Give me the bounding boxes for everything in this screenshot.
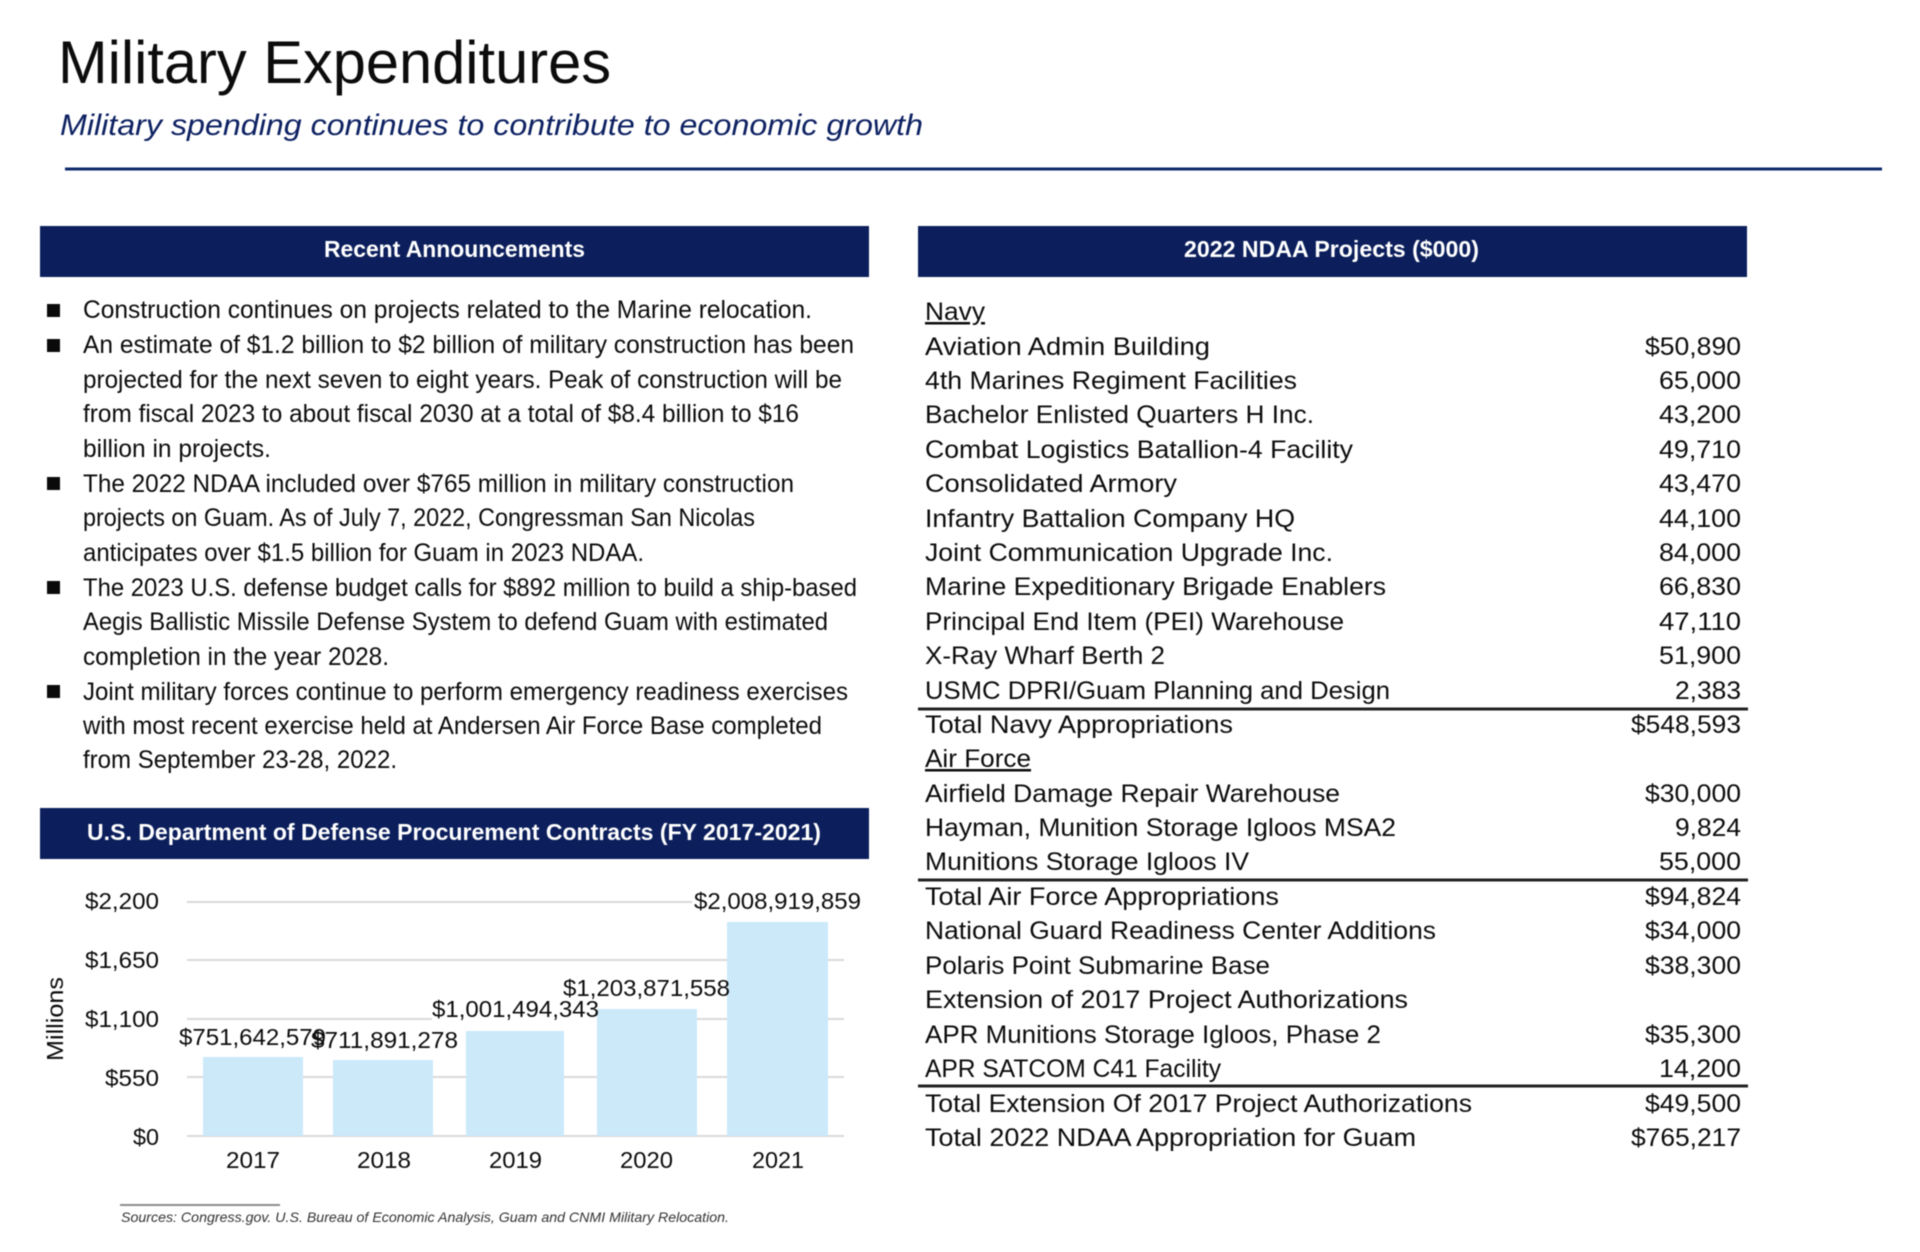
- subtitle: Military spending continues to contribute to economic growth: [60, 109, 923, 142]
- table of projects: $34,000: [1645, 917, 1741, 945]
- table of projects: Principal End Item (PEI) Warehouse: [925, 608, 1344, 636]
- y axis labels: $550: [105, 1065, 159, 1091]
- table of projects: Joint Communication Upgrade Inc.: [925, 539, 1333, 567]
- bullet list: The 2022 NDAA included over $765 million in military construction: [83, 470, 794, 498]
- table of projects: 9,824: [1675, 814, 1741, 842]
- table of projects: $50,890: [1645, 333, 1741, 361]
- table of projects: 4th Marines Regiment Facilities: [925, 367, 1297, 395]
- bar chart: [42, 888, 862, 1173]
- table of projects: Total Navy Appropriations: [925, 711, 1233, 739]
- table of projects: Bachelor Enlisted Quarters H Inc.: [925, 401, 1314, 429]
- bullet list: projects on Guam. As of July 7, 2022, Congressman San Nicolas: [83, 504, 755, 532]
- table of projects: 55,000: [1659, 848, 1741, 876]
- table of projects: Munitions Storage Igloos IV: [925, 848, 1249, 876]
- data labels: $1,203,871,558: [563, 975, 730, 1001]
- table of projects: 47,110: [1659, 608, 1741, 636]
- heading: recent announcements: Recent Announcements: [324, 236, 585, 262]
- table of projects: 84,000: [1659, 539, 1741, 567]
- table of projects: $35,300: [1645, 1021, 1741, 1049]
- y axis labels: $1,650: [85, 947, 159, 973]
- table of projects: Airfield Damage Repair Warehouse: [925, 780, 1340, 808]
- x axis labels: 2021: [752, 1147, 804, 1173]
- table of projects: $38,300: [1645, 952, 1741, 980]
- heading: recent announcements: [40, 226, 869, 277]
- table of projects: 51,900: [1659, 642, 1741, 670]
- bullet list: with most recent exercise held at Andersen Air Force Base completed: [82, 712, 822, 740]
- panel: recent announcements: [40, 226, 869, 774]
- data labels: $1,001,494,343: [432, 996, 599, 1022]
- table of projects: 49,710: [1659, 436, 1741, 464]
- table of projects: $49,500: [1645, 1090, 1741, 1118]
- bars: [203, 922, 828, 1136]
- table of projects: 14,200: [1659, 1055, 1741, 1083]
- bullet list: completion in the year 2028.: [83, 643, 389, 671]
- table of projects: Total Air Force Appropriations: [925, 883, 1279, 911]
- bullet list: Construction continues on projects related to the Marine relocation.: [83, 296, 812, 324]
- table of projects: Aviation Admin Building: [925, 333, 1210, 361]
- bullet list: The 2023 U.S. defense budget calls for $892 million to build a ship-based: [83, 574, 857, 602]
- bullet list: [47, 296, 857, 774]
- y axis labels: [85, 888, 159, 1150]
- table of projects: 43,200: [1659, 401, 1741, 429]
- table of projects: 44,100: [1659, 505, 1741, 533]
- data labels: $711,891,278: [311, 1027, 458, 1053]
- table of projects: Extension of 2017 Project Authorizations: [925, 986, 1408, 1014]
- table of projects: APR SATCOM C41 Facility: [925, 1055, 1221, 1083]
- table of projects: 65,000: [1659, 367, 1741, 395]
- table of projects: Polaris Point Submarine Base: [925, 952, 1270, 980]
- x axis labels: 2017: [226, 1147, 280, 1173]
- bullet list: anticipates over $1.5 billion for Guam in 2023 NDAA.: [83, 539, 644, 567]
- data labels: [179, 888, 861, 1053]
- table of projects: $94,824: [1645, 883, 1741, 911]
- table of projects: Total 2022 NDAA Appropriation for Guam: [925, 1124, 1416, 1152]
- table of projects: Combat Logistics Batallion-4 Facility: [925, 436, 1354, 464]
- heading: 2022 NDAA projects: [918, 226, 1747, 277]
- table of projects: 66,830: [1659, 573, 1741, 601]
- bullet list: An estimate of $1.2 billion to $2 billion of military construction has been: [83, 331, 854, 359]
- bullet list: billion in projects.: [83, 435, 271, 463]
- x axis labels: 2018: [357, 1147, 411, 1173]
- table of projects: $30,000: [1645, 780, 1741, 808]
- table of projects: Navy: [925, 298, 986, 326]
- x axis labels: 2020: [620, 1147, 673, 1173]
- bullet list: projected for the next seven to eight years. Peak of construction will be: [83, 366, 842, 394]
- bullet list: from fiscal 2023 to about fiscal 2030 at a total of $8.4 billion to $16: [83, 400, 799, 428]
- title: Military Expenditures: [58, 29, 611, 96]
- panel: 2022 NDAA projects: [918, 226, 1748, 1152]
- bullet list: from September 23-28, 2022.: [83, 746, 397, 774]
- table of projects: X-Ray Wharf Berth 2: [925, 642, 1165, 670]
- data labels: $751,642,579: [179, 1024, 326, 1050]
- table of projects: Air Force: [925, 745, 1031, 773]
- y axis labels: $2,200: [85, 888, 159, 914]
- heading: 2022 NDAA projects: 2022 NDAA Projects ($000): [1184, 236, 1479, 262]
- y axis labels: $0: [133, 1124, 159, 1150]
- panel: procurement contracts: [40, 808, 869, 1173]
- data labels: $2,008,919,859: [694, 888, 861, 914]
- heading: procurement contracts: [40, 808, 869, 859]
- table of projects: Total Extension Of 2017 Project Authorizations: [925, 1090, 1472, 1118]
- table of projects: 2,383: [1675, 677, 1741, 705]
- bullet list: Joint military forces continue to perform emergency readiness exercises: [83, 678, 848, 706]
- table of projects: Consolidated Armory: [925, 470, 1178, 498]
- x axis labels: [226, 1147, 804, 1173]
- table of projects: National Guard Readiness Center Additions: [925, 917, 1436, 945]
- table of projects: [918, 298, 1748, 1152]
- table of projects: 43,470: [1659, 470, 1741, 498]
- x axis labels: 2019: [489, 1147, 542, 1173]
- table of projects: Hayman, Munition Storage Igloos MSA2: [925, 814, 1396, 842]
- table of projects: Infantry Battalion Company HQ: [925, 505, 1295, 533]
- table of projects: $765,217: [1631, 1124, 1741, 1152]
- bullet list: Aegis Ballistic Missile Defense System to defend Guam with estimated: [83, 608, 828, 636]
- y axis labels: $1,100: [85, 1006, 159, 1032]
- table of projects: Marine Expeditionary Brigade Enablers: [925, 573, 1386, 601]
- table of projects: APR Munitions Storage Igloos, Phase 2: [925, 1021, 1381, 1049]
- y axis title: Millions: [42, 977, 68, 1061]
- heading: procurement contracts: U.S. Department of Defense Procurement Contracts (FY 2017-2021): [87, 819, 821, 845]
- table of projects: USMC DPRI/Guam Planning and Design: [925, 677, 1390, 705]
- source note: Sources: Congress.gov. U.S. Bureau of Economic Analysis, Guam and CNMI Military Relocation.: [121, 1209, 729, 1225]
- table of projects: $548,593: [1631, 711, 1741, 739]
